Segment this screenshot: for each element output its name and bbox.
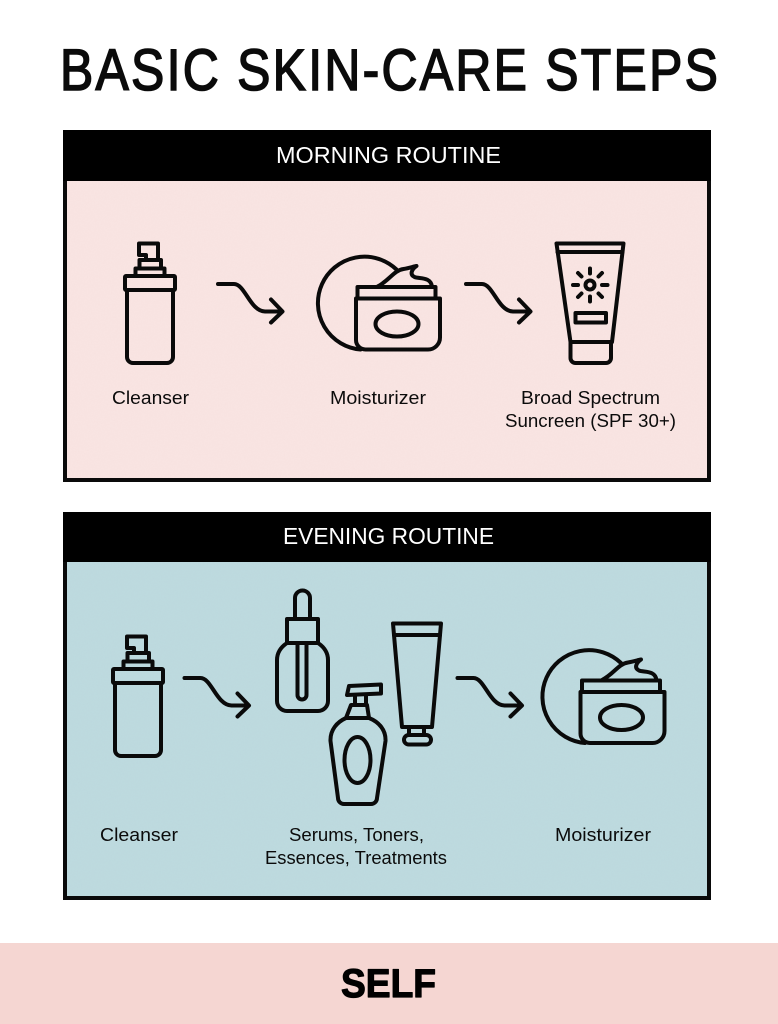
arrow: moisturizer to sunscreen bbox=[466, 284, 530, 322]
footer band bbox=[0, 943, 778, 1024]
label: moisturizer: Moisturizer bbox=[330, 387, 426, 408]
label: broad spectrum sunscreen: Broad Spectrum bbox=[521, 387, 660, 408]
arrow: serums to moisturizer bbox=[458, 678, 522, 716]
label: cleanser: Cleanser bbox=[100, 824, 178, 845]
morning heading bar: MORNING ROUTINE bbox=[276, 142, 501, 168]
panel: evening routine bbox=[63, 512, 711, 898]
icon: dropper serum bottle bbox=[277, 590, 328, 711]
panel: morning routine bbox=[63, 130, 711, 480]
label: serums, toners, essences, treatments: Essences, Treatments bbox=[265, 847, 447, 868]
icon: moisturizer jar bbox=[542, 650, 664, 743]
label: serums, toners, essences, treatments: Serums, Toners, bbox=[289, 824, 424, 845]
evening heading bar: EVENING ROUTINE bbox=[283, 523, 494, 549]
morning heading bar bbox=[63, 130, 711, 181]
icon: squeeze tube bbox=[393, 624, 441, 744]
icon: moisturizer jar bbox=[318, 257, 440, 350]
icon: cleanser bottle bbox=[113, 636, 163, 756]
icon: pump bottle bbox=[330, 684, 386, 804]
logo: SELF: SELF bbox=[341, 962, 436, 1006]
icon: sunscreen tube bbox=[556, 244, 624, 363]
title: BASIC SKIN-CARE STEPS bbox=[60, 39, 718, 103]
label: cleanser: Cleanser bbox=[112, 387, 189, 408]
label: moisturizer: Moisturizer bbox=[555, 824, 651, 845]
arrow: cleanser to moisturizer bbox=[218, 284, 282, 322]
icon: cleanser bottle bbox=[125, 244, 175, 363]
label: broad spectrum sunscreen bbox=[505, 387, 676, 431]
arrow: cleanser to serums bbox=[184, 678, 249, 716]
label: serums, toners, essences, treatments bbox=[265, 824, 447, 868]
label: broad spectrum sunscreen: Suncreen (SPF 30+) bbox=[505, 410, 676, 431]
evening heading bar bbox=[63, 512, 711, 562]
